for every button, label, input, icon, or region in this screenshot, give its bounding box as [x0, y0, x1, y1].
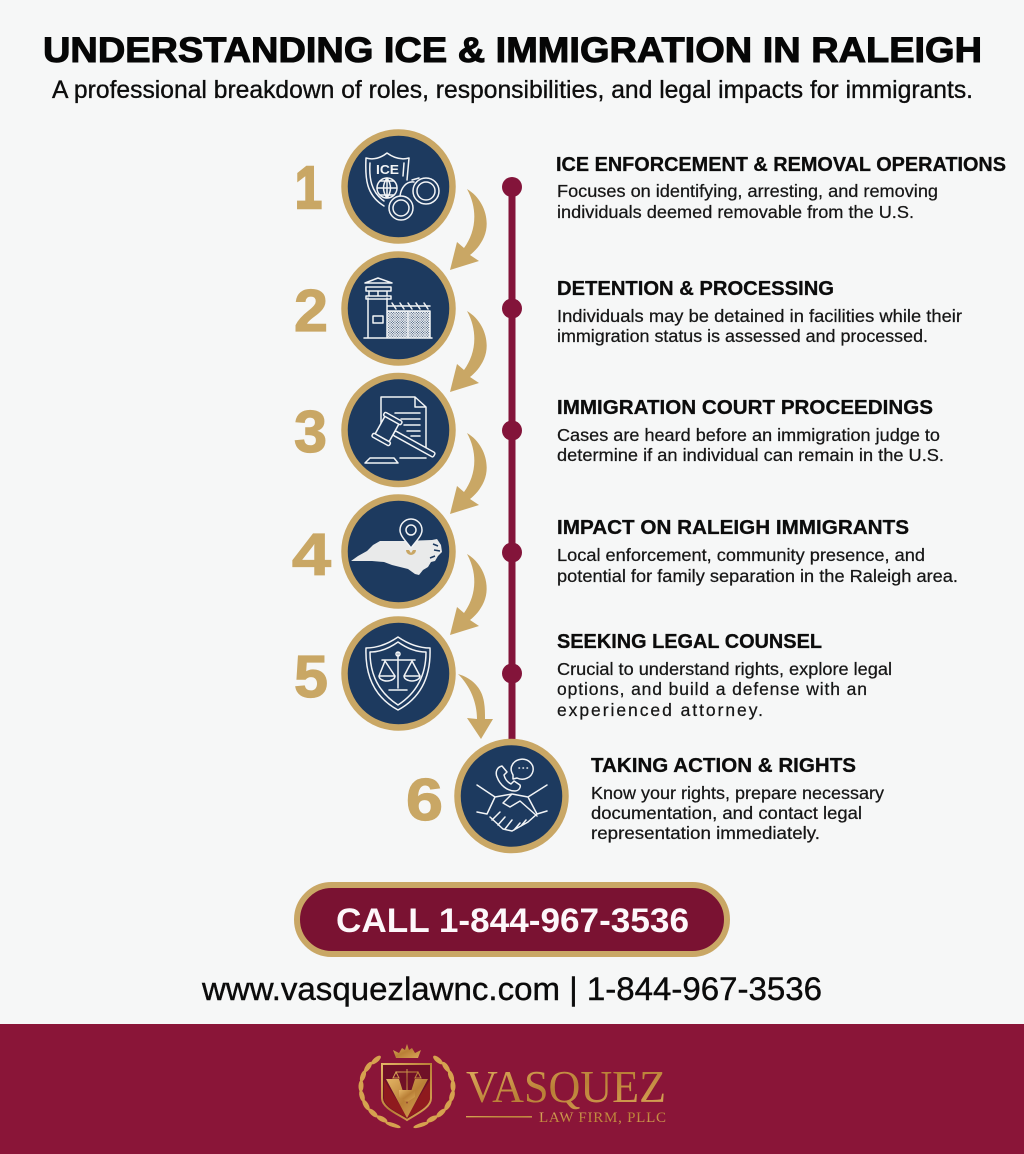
- step 6: description: representation immediately.: [591, 823, 820, 843]
- step 3: heading: IMMIGRATION COURT PROCEEDINGS: [557, 397, 933, 419]
- step 4: description: Local enforcement, community presence, and: [557, 545, 925, 565]
- step 3: description: Cases are heard before an immigration judge to: [557, 425, 940, 445]
- step 1: description: Focuses on identifying, arresting, and removing: [557, 181, 938, 201]
- logo: Vasquez Law Firm: [358, 1044, 666, 1129]
- logo emblem: shield: [382, 1064, 431, 1120]
- logo emblem: right laurel: [413, 1054, 456, 1129]
- step 3: icon gavel and document: [344, 376, 452, 484]
- arrow: step 3 to 4: [450, 433, 487, 514]
- step 6: description: documentation, and contact legal: [591, 803, 862, 823]
- step 1: description: [557, 181, 938, 222]
- step 5: description: [557, 659, 892, 720]
- step 4: icon North Carolina map with pin: [344, 498, 452, 606]
- gavel: [371, 412, 441, 467]
- arrow: step 2 to 3: [450, 311, 487, 392]
- step 5: description: options, and build a defense with an: [557, 679, 867, 699]
- subtitle: A professional breakdown of roles, responsibilities, and legal impacts for immigrants.: [52, 76, 973, 104]
- step 2: icon watchtower and fence: [344, 254, 452, 362]
- step 2: description: Individuals may be detained in facilities while their: [557, 306, 962, 326]
- step 2: description: [557, 306, 962, 346]
- step 2: heading: DETENTION & PROCESSING: [557, 278, 834, 300]
- step 4: description: [557, 545, 958, 586]
- step 1: heading: ICE ENFORCEMENT & REMOVAL OPERATIONS: [556, 154, 1006, 176]
- call button: [297, 885, 727, 954]
- step 4: description: potential for family separation in the Raleigh area.: [557, 566, 958, 586]
- logo rule: [466, 1116, 532, 1118]
- step 2: number: 2: [294, 278, 328, 344]
- arrow: step 1 to 2: [450, 189, 487, 270]
- website and phone line: www.vasquezlawnc.com | 1-844-967-3536: [201, 971, 822, 1007]
- step 5: number: 5: [294, 644, 328, 710]
- title: UNDERSTANDING ICE & IMMIGRATION IN RALEIGH: [43, 31, 982, 70]
- step 2: description: immigration status is assessed and processed.: [557, 326, 928, 346]
- arrow: step 5 to 6: [458, 674, 493, 739]
- step 6: description: Know your rights, prepare necessary: [591, 783, 884, 803]
- step 6: heading: TAKING ACTION & RIGHTS: [591, 755, 856, 777]
- logo wordmark: VASQUEZ: [466, 1061, 666, 1112]
- step 4: number: 4: [292, 522, 331, 588]
- call button: CALL 1-844-967-3536: [336, 902, 689, 940]
- step 1: icon ICE badge and handcuffs: ICE: [376, 163, 399, 177]
- step 1: number: 1: [295, 155, 322, 221]
- step 5: description: experienced attorney.: [557, 700, 763, 720]
- step 1: icon ICE badge and handcuffs: [344, 132, 452, 240]
- logo emblem: crown: [393, 1044, 421, 1058]
- step 5: heading: SEEKING LEGAL COUNSEL: [557, 631, 822, 653]
- step 5: icon shield with scales: [344, 620, 452, 728]
- logo emblem: left laurel: [358, 1054, 401, 1129]
- step 4: heading: IMPACT ON RALEIGH IMMIGRANTS: [557, 517, 909, 539]
- step 1: description: individuals deemed removable from the U.S.: [557, 202, 914, 222]
- timeline line with dots: [502, 177, 522, 743]
- footer band: [0, 1024, 1024, 1154]
- step 3: number: 3: [294, 399, 327, 465]
- arrow: step 4 to 5: [450, 554, 487, 635]
- step 3: description: [557, 425, 944, 465]
- step 3: description: determine if an individual can remain in the U.S.: [557, 445, 944, 465]
- logo tagline: LAW FIRM, PLLC: [539, 1110, 666, 1126]
- step 6: number: 6: [406, 767, 443, 833]
- step 6: icon phone and handshake: [458, 742, 566, 850]
- step 6: description: [591, 783, 884, 843]
- step 5: description: Crucial to understand rights, explore legal: [557, 659, 892, 679]
